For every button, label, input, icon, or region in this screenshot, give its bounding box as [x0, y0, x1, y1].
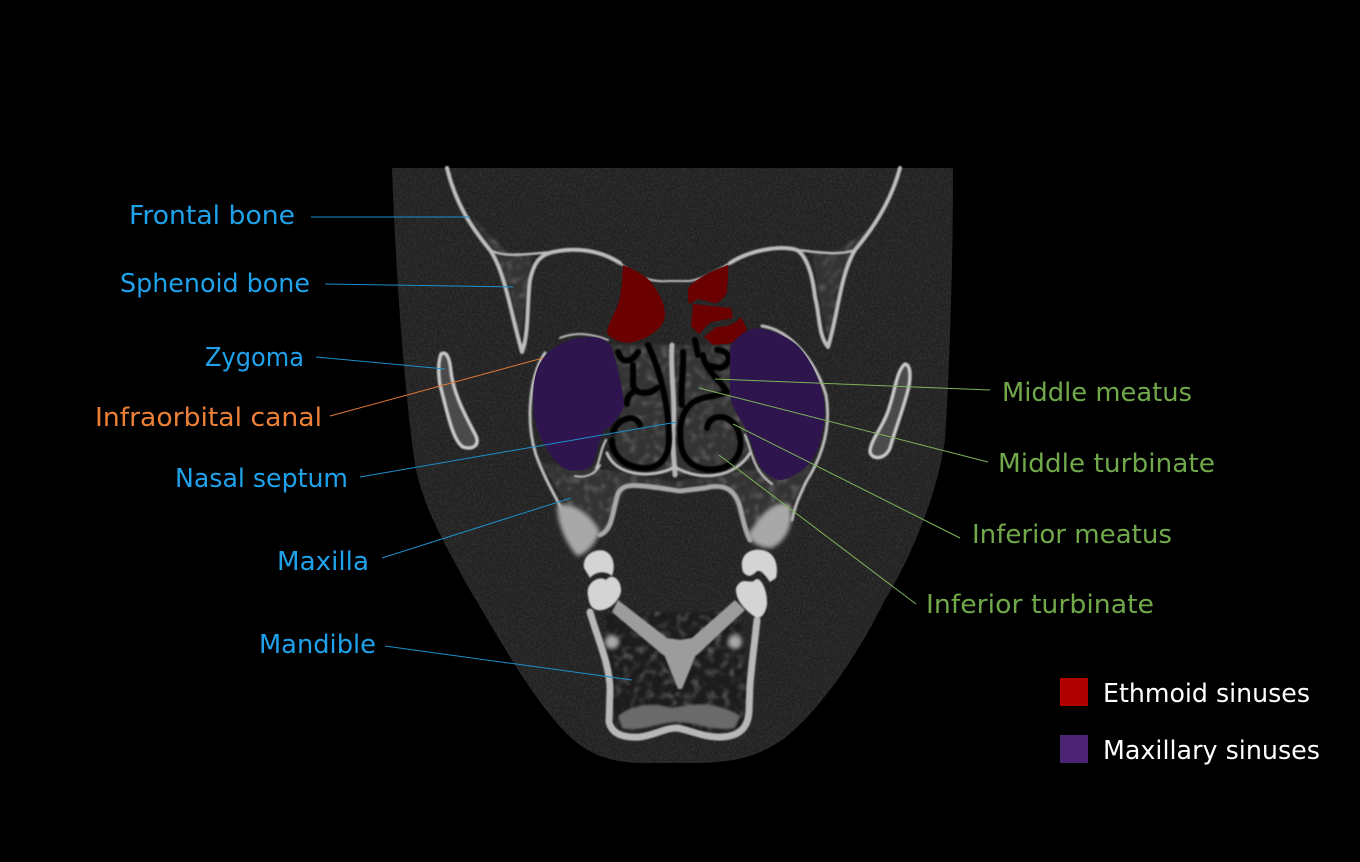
right lower ethmoid cell — [704, 317, 747, 345]
right middle ethmoid cell — [691, 304, 733, 334]
label: Nasal septum — [175, 422, 677, 494]
alveolar bone blobs — [557, 503, 791, 649]
ethmoid sinuses overlay — [607, 265, 747, 345]
label: Nasal septum: Nasal septum — [175, 464, 348, 494]
label: Frontal bone: Frontal bone — [129, 201, 295, 231]
label: Zygoma: Zygoma — [205, 343, 304, 373]
label: Maxilla: Maxilla — [277, 547, 369, 577]
label: Middle meatus: Middle meatus — [1002, 378, 1192, 408]
label: Mandible: Mandible — [259, 630, 376, 660]
label: Infraorbital canal: Infraorbital canal — [95, 403, 322, 433]
label: Middle turbinate — [699, 388, 1215, 479]
soft tissue silhouette — [392, 168, 953, 763]
maxillary sinus walls — [530, 353, 563, 512]
palate and mouth cavity roof — [600, 486, 750, 540]
label: Inferior turbinate: Inferior turbinate — [926, 590, 1154, 620]
legend swatch: ethmoid sinuses — [1060, 678, 1088, 706]
legend text: ethmoid sinuses: Ethmoid sinuses — [1103, 679, 1310, 709]
label: Inferior meatus: Inferior meatus — [972, 520, 1172, 550]
nasal floor arcs — [607, 453, 750, 476]
CT scan: coronal section of the skull — [392, 168, 953, 763]
label: Middle turbinate: Middle turbinate — [998, 449, 1215, 479]
left ethmoid sinus — [607, 265, 665, 343]
label: Mandible — [259, 630, 632, 680]
nasal septum — [672, 345, 675, 475]
bright cortical bone outlines — [447, 168, 900, 737]
mandible ridge — [612, 600, 745, 689]
label: Middle meatus — [715, 378, 1192, 408]
left maxillary sinus — [533, 337, 624, 471]
cancellous bone around the cavities — [470, 215, 875, 732]
maxillary sinuses overlay — [533, 328, 825, 480]
teeth — [584, 550, 777, 618]
label: Sphenoid bone — [120, 269, 513, 299]
black nasal air passages and turbinates — [612, 340, 741, 469]
right upper ethmoid cell — [688, 265, 728, 304]
right maxillary sinus — [730, 328, 825, 480]
zygomatic arches — [439, 353, 910, 458]
label: Inferior turbinate — [719, 455, 1154, 620]
legend swatch: maxillary sinuses — [1060, 735, 1088, 763]
label: Sphenoid bone: Sphenoid bone — [120, 269, 310, 299]
mandible outer cortex — [590, 612, 757, 737]
label: Infraorbital canal — [95, 358, 543, 433]
legend — [1060, 678, 1320, 766]
frontal and sphenoid bone, left — [447, 168, 620, 352]
label: Zygoma — [205, 343, 445, 373]
label: Inferior meatus — [733, 424, 1172, 550]
legend text: maxillary sinuses: Maxillary sinuses — [1103, 736, 1320, 766]
label: Maxilla — [277, 498, 571, 577]
mandible trabecular bottom band — [618, 704, 740, 729]
frontal and sphenoid bone, right — [730, 168, 900, 347]
